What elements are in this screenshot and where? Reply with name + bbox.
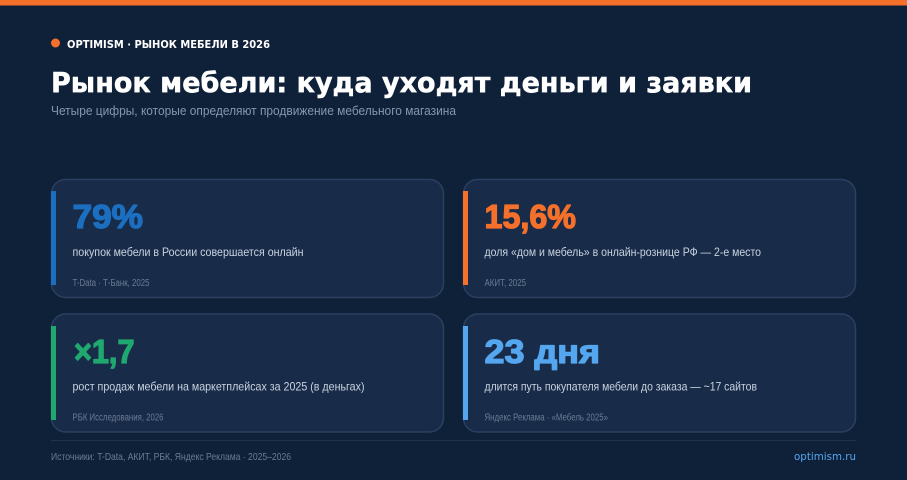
source: РБК Исследования, 2026	[72, 412, 164, 424]
stat: 23 дня	[484, 334, 600, 371]
footer link: optimism.ru	[794, 450, 856, 463]
panel: x1.7 marketplace growth	[51, 314, 444, 432]
panel: 15,6% home and furniture share	[463, 180, 856, 298]
source: T-Data · Т-Банк, 2025	[72, 278, 150, 289]
description: рост продаж мебели на маркетплейсах за 2025 (в деньгах)	[72, 380, 364, 394]
top accent bar	[0, 0, 907, 6]
accent bar blue	[51, 191, 56, 285]
stat: 79%	[72, 199, 143, 236]
footer sources: Источники: T-Data, АКИТ, РБК, Яндекс Реклама · 2025–2026	[51, 451, 291, 463]
description: доля «дом и мебель» в онлайн-рознице РФ — 2-е место	[484, 245, 761, 259]
accent bar green	[51, 326, 56, 420]
accent bar orange	[463, 191, 468, 285]
stat: ×1,7	[74, 334, 134, 371]
source: Яндекс Реклама · «Мебель 2025»	[484, 412, 608, 424]
description: длится путь покупателя мебели до заказа — ~17 сайтов	[484, 380, 757, 394]
panel: 79% online purchases	[51, 180, 444, 298]
description: покупок мебели в России совершается онлайн	[72, 245, 304, 259]
subtitle: Четыре цифры, которые определяют продвижение мебельного магазина	[51, 103, 457, 118]
accent bar light blue	[463, 326, 468, 420]
title: Рынок мебели: куда уходят деньги и заявки	[51, 66, 752, 99]
eyebrow: OPTIMISM · РЫНОК МЕБЕЛИ В 2026	[67, 39, 270, 51]
source: АКИТ, 2025	[484, 278, 526, 289]
panel: 23 days buyer journey	[463, 314, 856, 432]
stat: 15,6%	[484, 199, 576, 236]
